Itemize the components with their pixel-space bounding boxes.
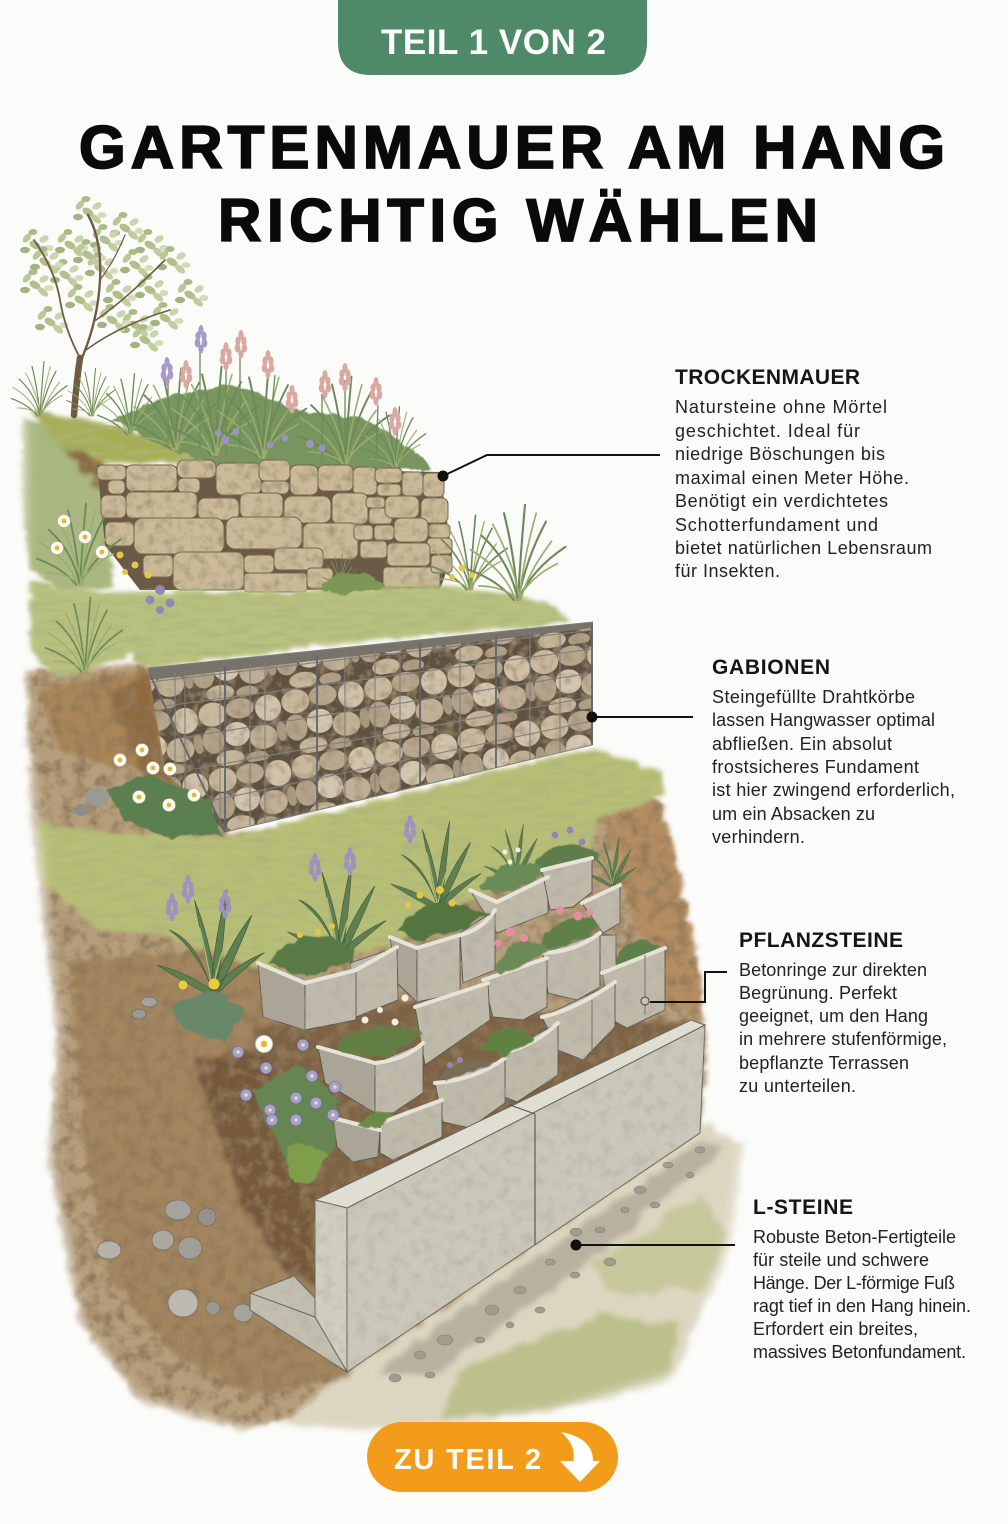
text block: L-Steine: L-STEINE <box>753 1196 853 1219</box>
text block: Pflanzsteine: geeignet, um den Hang <box>739 1006 928 1026</box>
top-left double block <box>258 947 398 1030</box>
flowers on slope <box>170 978 341 1182</box>
tree <box>20 196 208 415</box>
plant: purple back <box>535 844 600 871</box>
gravel <box>389 1147 705 1382</box>
text block: Pflanzsteine <box>739 929 947 1096</box>
text block: Gabionen: ist hier zwingend erforderlich, <box>712 780 955 800</box>
text block: Trockenmauer: TROCKENMAUER <box>675 366 860 389</box>
text block: Gabionen: lassen Hangwasser optimal <box>712 710 935 730</box>
title: RICHTIG WÄHLEN <box>218 187 818 254</box>
text block: L-Steine <box>753 1196 971 1362</box>
text block: Trockenmauer: Schotterfundament und <box>675 515 878 535</box>
text block: L-Steine: ragt tief in den Hang hinein. <box>753 1296 971 1316</box>
button: to part 2: ZU TEIL 2 <box>394 1444 541 1476</box>
text block: Pflanzsteine: Betonringe zur direkten <box>739 960 927 980</box>
leader: Trockenmauer <box>438 455 660 480</box>
tall plants behind planting stones <box>157 815 637 995</box>
text block: Trockenmauer: bietet natürlichen Lebensraum <box>675 538 932 558</box>
text block: Pflanzsteine: in mehrere stufenförmige, <box>739 1029 947 1049</box>
middle blocks <box>390 910 665 1065</box>
text block: Pflanzsteine: zu unterteilen. <box>739 1076 856 1096</box>
text block: Gabionen: frostsicheres Fundament <box>712 757 919 777</box>
text block: Pflanzsteine: Begrünung. Perfekt <box>739 983 897 1003</box>
gabion soil backing <box>110 672 180 790</box>
badge: part 1 of 2: TEIL 1 VON 2 <box>381 23 606 62</box>
paper fade along illustration edge <box>14 420 754 1444</box>
plant: white flowers back <box>480 863 548 893</box>
plant: right block <box>610 940 660 965</box>
text block: L-Steine: für steile und schwere <box>753 1250 929 1270</box>
text block: Gabionen: GABIONEN <box>712 656 830 679</box>
icon: curved arrow down <box>560 1432 600 1482</box>
title: GARTENMAUER AM HANG <box>79 114 945 181</box>
soil base <box>25 665 706 1432</box>
leader: L-Steine <box>572 1240 735 1250</box>
text block: Gabionen <box>712 656 955 847</box>
planting stones <box>258 844 665 1162</box>
text block: L-Steine: massives Betonfundament. <box>753 1342 966 1362</box>
text block: Gabionen: Steingefüllte Drahtkörbe <box>712 687 915 707</box>
text block: Trockenmauer: Natursteine ohne Mörtel <box>675 397 887 417</box>
tree trunk and branches <box>34 215 170 415</box>
gabions <box>148 622 593 832</box>
second terrace grass <box>38 748 664 968</box>
L-stones <box>250 1020 705 1372</box>
soil bed behind planting stones <box>250 1000 690 1208</box>
text block: Trockenmauer <box>675 366 932 581</box>
text block: Trockenmauer: für Insekten. <box>675 561 780 581</box>
text block: Gabionen: abfließen. Ein absolut <box>712 734 892 754</box>
dry stone wall <box>97 460 452 592</box>
illustration: terraced slope cross-section <box>11 196 754 1444</box>
badge: part 1 of 2 <box>338 0 647 75</box>
front row blocks <box>318 1023 558 1162</box>
top grass <box>30 410 215 464</box>
text block: Trockenmauer: maximal einen Meter Höhe. <box>675 468 909 488</box>
upper left green bank <box>20 420 112 590</box>
text block: Trockenmauer: niedrige Böschungen bis <box>675 444 885 464</box>
text block: L-Steine: Erfordert ein breites, <box>753 1319 918 1339</box>
button: to part 2 <box>367 1422 618 1492</box>
stones buried in soil <box>97 997 253 1322</box>
lower ground in front of L-stones <box>280 1125 745 1432</box>
text block: Trockenmauer: Benötigt ein verdichtetes <box>675 491 888 511</box>
first terrace grass <box>30 582 572 680</box>
text block: Pflanzsteine: bepflanzte Terrassen <box>739 1053 909 1073</box>
soil under top grass <box>62 445 100 490</box>
text block: Trockenmauer: geschichtet. Ideal für <box>675 421 860 441</box>
text block: Gabionen: um ein Absacken zu <box>712 804 875 824</box>
top meadow plants <box>11 325 430 470</box>
daisy plant and rocks at gabion foot <box>74 744 220 838</box>
text block: L-Steine: Robuste Beton-Fertigteile <box>753 1227 956 1247</box>
text block: Gabionen: verhindern. <box>712 827 805 847</box>
title <box>79 114 945 254</box>
plants in planting stones <box>270 826 600 1128</box>
text block: L-Steine: Hänge. Der L-förmige Fuß <box>753 1273 955 1293</box>
tree foliage <box>20 196 208 353</box>
leader: Pflanzsteine <box>641 972 727 1005</box>
leader: Gabionen <box>588 712 693 722</box>
plants around dry wall <box>37 503 566 672</box>
back row blocks <box>470 858 620 933</box>
text block: Pflanzsteine: PFLANZSTEINE <box>739 929 903 952</box>
